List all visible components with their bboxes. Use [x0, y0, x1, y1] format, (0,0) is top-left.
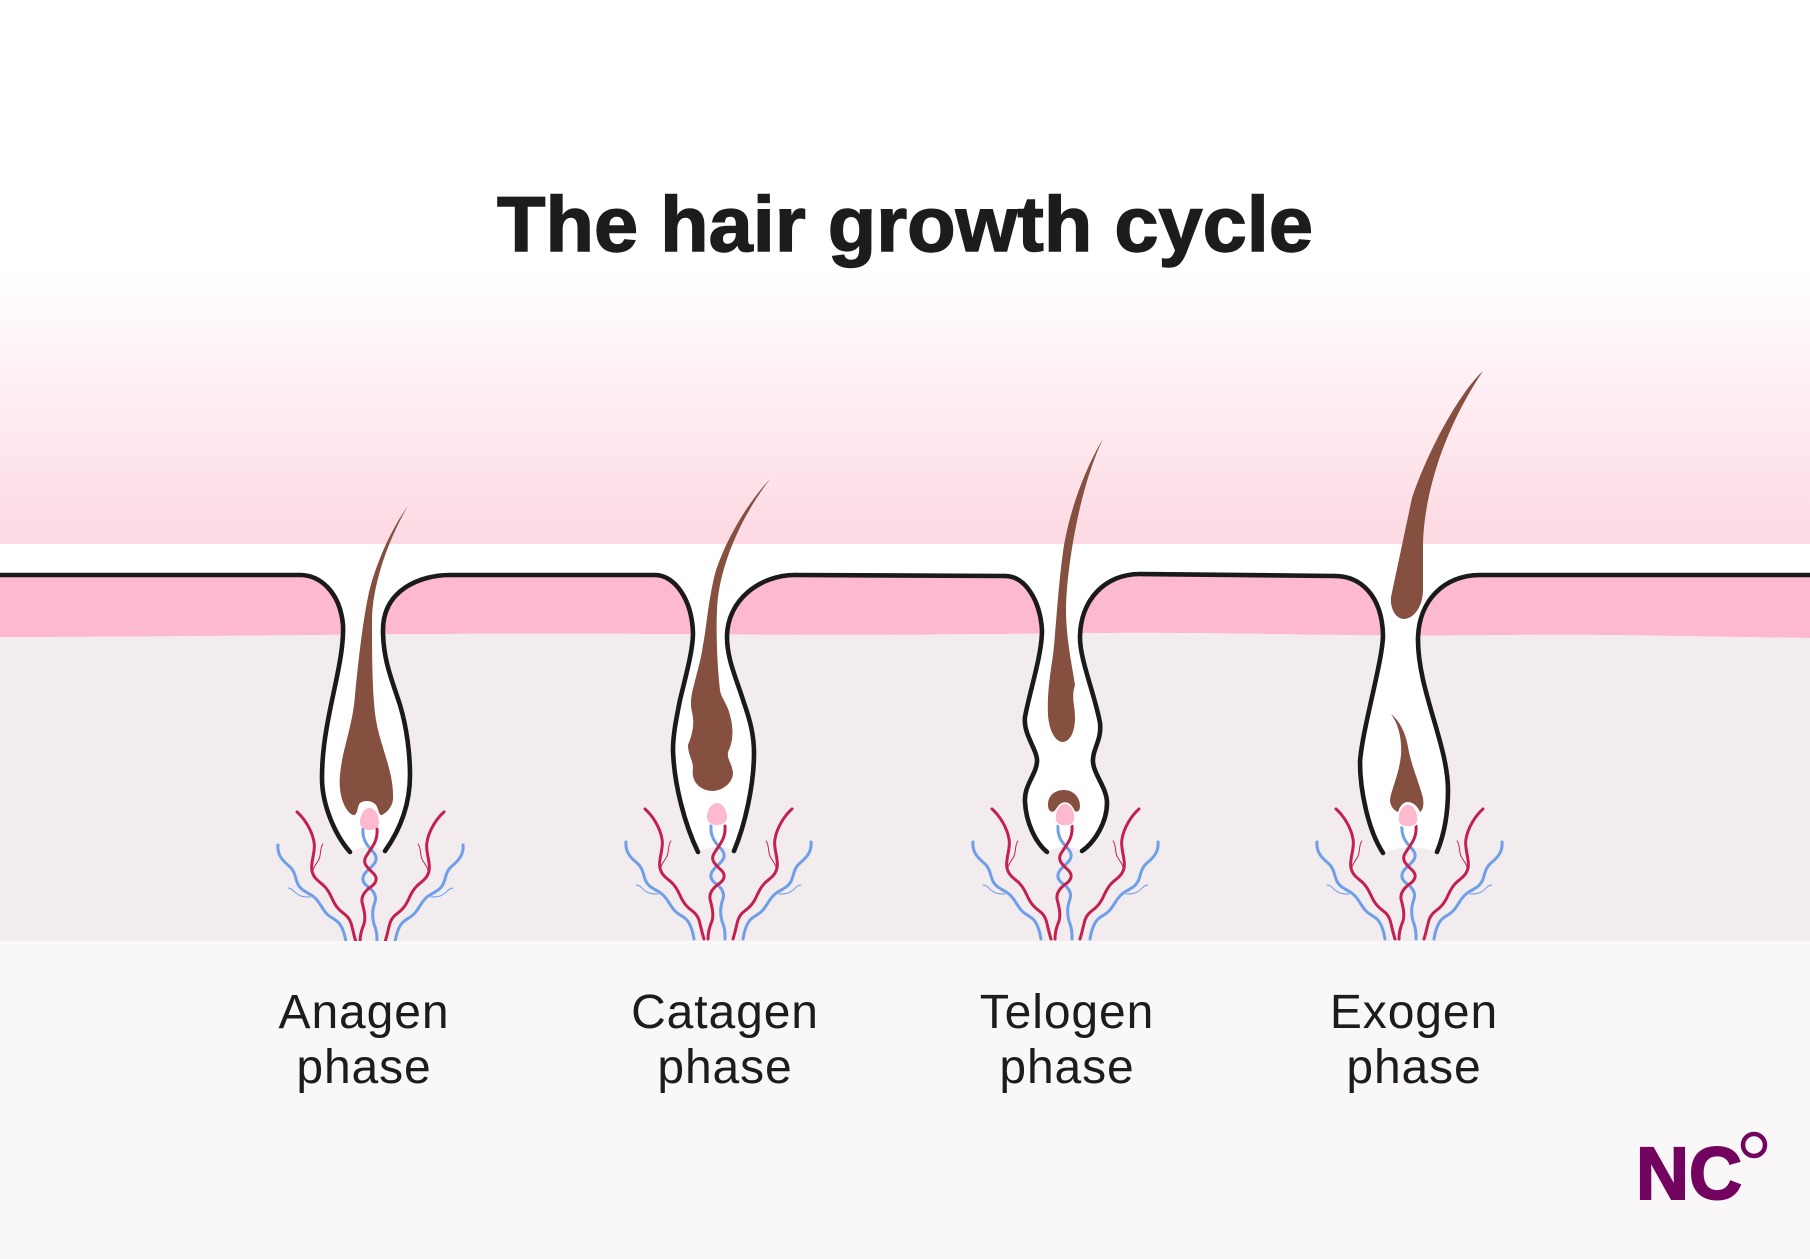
- follicle: exogen phase: [1317, 371, 1502, 939]
- follicle: anagen phase: [278, 506, 463, 942]
- logo: NC: [1636, 1132, 1765, 1215]
- follicle: catagen phase: [626, 479, 811, 939]
- blood vessels: [1317, 809, 1502, 939]
- label: catagen phase: phase: [657, 1041, 793, 1094]
- shedding hair: [1391, 371, 1483, 619]
- dermal papilla: [360, 808, 379, 830]
- title: The hair growth cycle: [497, 180, 1313, 268]
- logo ring: [1743, 1134, 1765, 1156]
- skin surface line: [0, 574, 1810, 576]
- dermal papilla: [1055, 803, 1075, 826]
- hair: [688, 479, 770, 791]
- blood vessels: [278, 812, 463, 942]
- label: anagen phase: Anagen: [279, 986, 449, 1039]
- logo letters: NC: [1636, 1132, 1742, 1215]
- follicle walls: [300, 575, 450, 852]
- new hair: [1390, 714, 1423, 812]
- follicle walls: [1005, 574, 1140, 852]
- dermal papilla: [1398, 804, 1418, 827]
- label: catagen phase: Catagen: [631, 986, 819, 1039]
- hair: [1048, 439, 1103, 742]
- background: grey tissue layer: [0, 633, 1810, 941]
- follicle cavity: [655, 570, 795, 852]
- follicle cavity: [300, 570, 450, 852]
- follicle: telogen phase: [973, 439, 1158, 939]
- background: pink skin layer: [0, 575, 1810, 638]
- hair: [340, 506, 408, 815]
- label: exogen phase: Exogen: [1330, 986, 1498, 1039]
- label: exogen phase: phase: [1346, 1041, 1482, 1094]
- follicle walls: [655, 575, 795, 852]
- label: telogen phase: Telogen: [980, 986, 1154, 1039]
- follicle walls: [1335, 575, 1480, 853]
- dermal papilla: [707, 803, 727, 825]
- detached hair bulb: [1048, 790, 1080, 812]
- follicle cavity: [1005, 570, 1140, 852]
- blood vessels: [626, 809, 811, 939]
- label: telogen phase: phase: [999, 1041, 1135, 1094]
- follicle cavity: [1335, 570, 1480, 853]
- blood vessels: [973, 809, 1158, 939]
- background: air gradient above the skin: [0, 270, 1810, 544]
- bottom panel: [0, 941, 1810, 1259]
- label: anagen phase: phase: [296, 1041, 432, 1094]
